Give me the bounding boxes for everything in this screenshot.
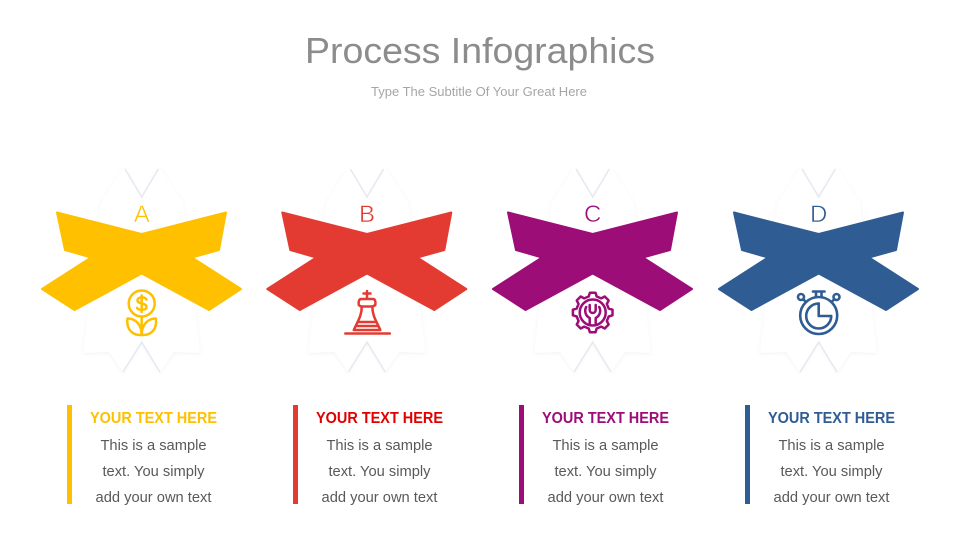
backing shape A [83, 169, 200, 372]
text block C [519, 405, 669, 506]
panel: D [719, 169, 918, 372]
accent bar D [745, 405, 750, 504]
icon: stopwatch [798, 292, 840, 334]
text block B [293, 405, 443, 506]
letter C: C [584, 201, 601, 228]
body D: text. You simply [780, 464, 883, 480]
body C: text. You simply [554, 464, 657, 480]
heading D: YOUR TEXT HERE [768, 410, 895, 427]
icon: gear wrench [573, 293, 613, 332]
body D: This is a sample [778, 438, 885, 454]
body A: This is a sample [100, 438, 207, 454]
accent bar B [293, 405, 298, 504]
body A: add your own text [96, 490, 211, 506]
accent bar A [67, 405, 72, 504]
body B: text. You simply [328, 464, 431, 480]
body C: add your own text [548, 490, 663, 506]
body D: add your own text [774, 490, 889, 506]
subtitle: Type The Subtitle Of Your Great Here [371, 85, 587, 99]
letter D: D [810, 201, 827, 228]
text block D [745, 405, 895, 506]
cross D [719, 212, 918, 310]
heading C: YOUR TEXT HERE [542, 410, 669, 427]
cross C [493, 212, 692, 310]
letter A: A [134, 201, 150, 228]
letter B: B [359, 201, 375, 228]
cross B [267, 212, 466, 310]
backing shape B [308, 169, 425, 372]
panel: B [267, 169, 466, 372]
panel: C [493, 169, 692, 372]
heading A: YOUR TEXT HERE [90, 410, 217, 427]
body C: This is a sample [552, 438, 659, 454]
panel: A [42, 169, 241, 372]
cross A [42, 212, 241, 310]
body B: add your own text [322, 490, 437, 506]
accent bar C [519, 405, 524, 504]
body A: text. You simply [102, 464, 205, 480]
heading B: YOUR TEXT HERE [316, 410, 443, 427]
icon: money flower [127, 290, 156, 335]
title: Process Infographics [305, 30, 655, 71]
icon: chess king [345, 291, 390, 334]
backing shape D [760, 169, 877, 372]
body B: This is a sample [326, 438, 433, 454]
backing shape C [534, 169, 651, 372]
text block A [67, 405, 217, 506]
